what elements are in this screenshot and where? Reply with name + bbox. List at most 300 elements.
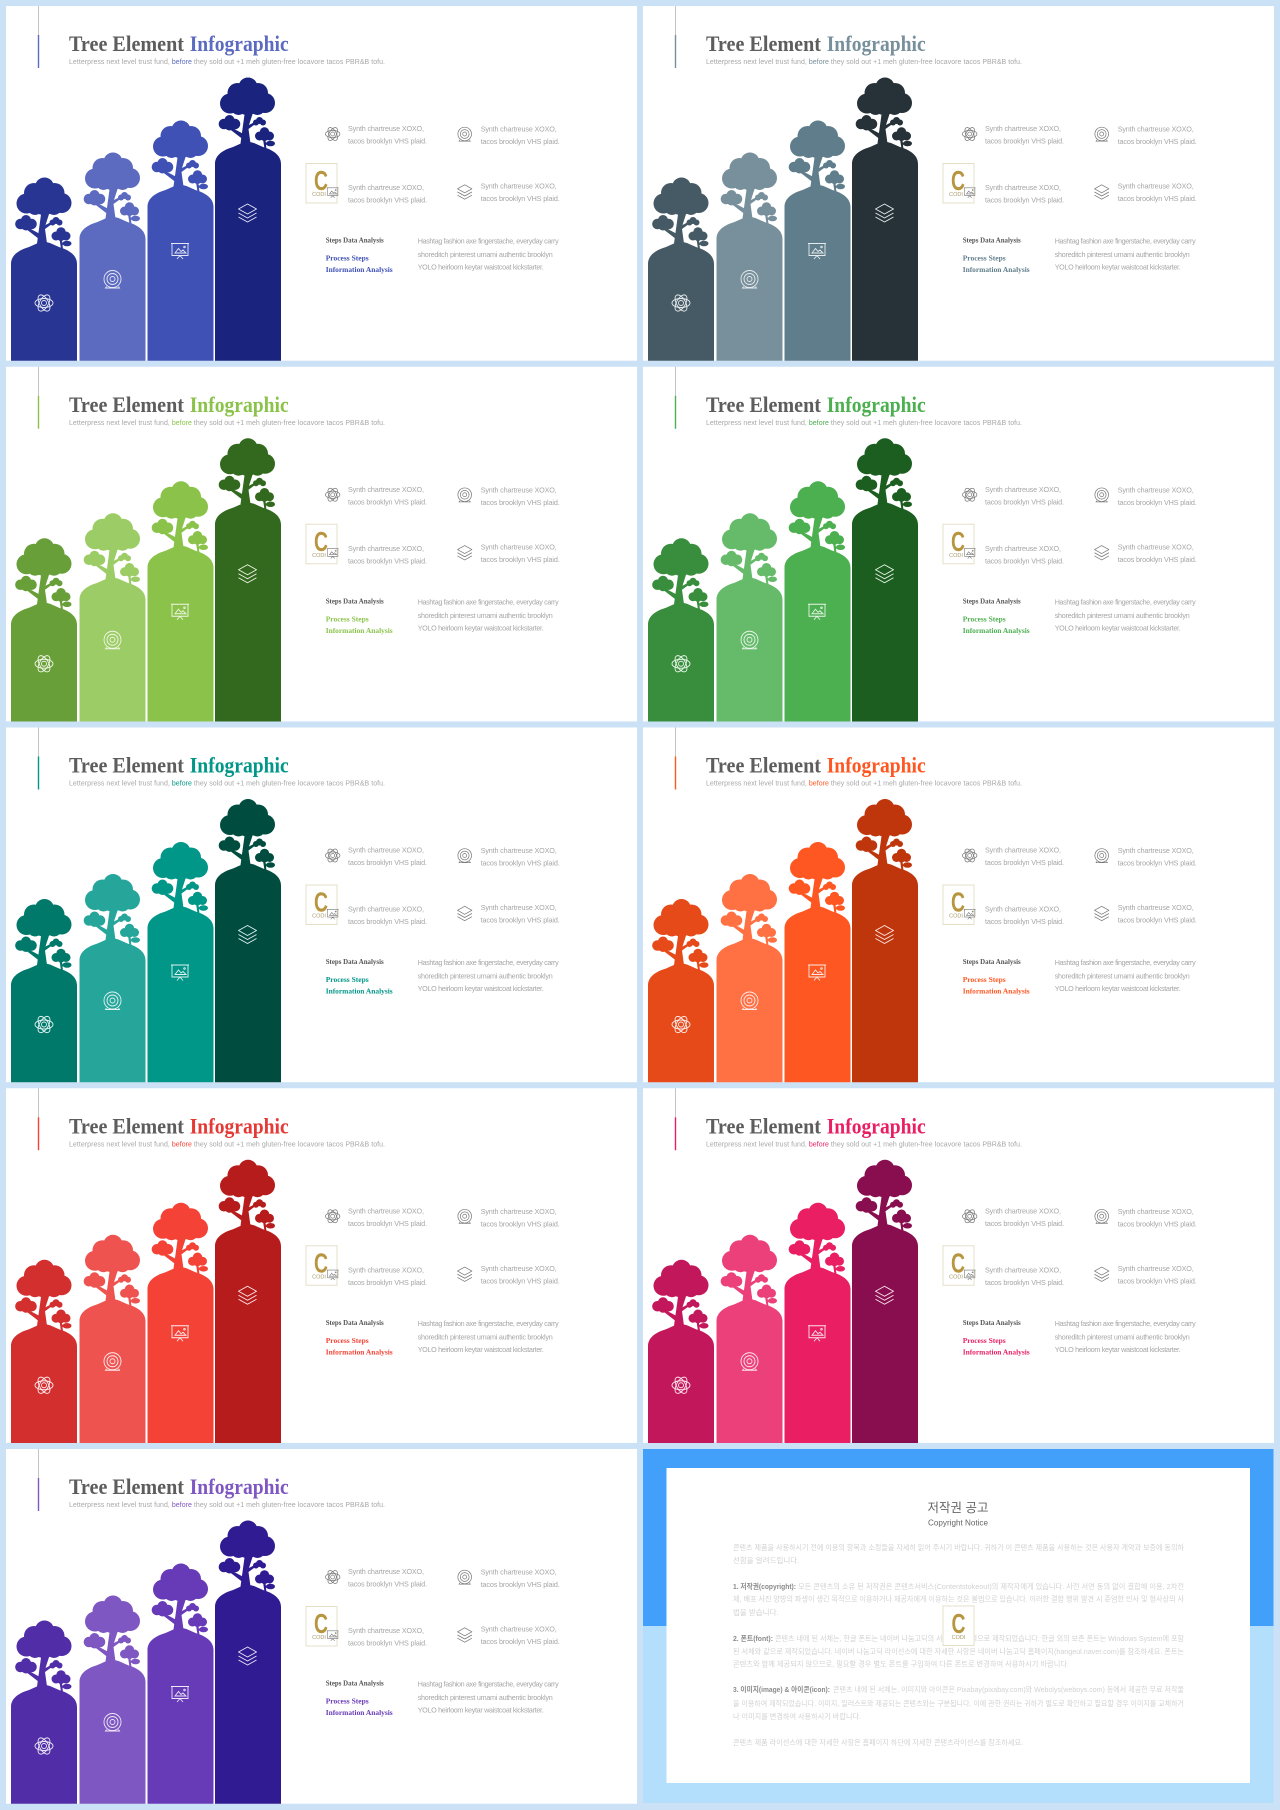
icon: layers	[458, 906, 472, 921]
tree bar 4	[215, 1520, 281, 1804]
logo stamp: C	[951, 526, 965, 557]
feature 1 text: tacos brooklyn VHS plaid.	[985, 858, 1064, 867]
feature 3 text	[985, 1265, 1064, 1287]
icon: layers	[1094, 1267, 1109, 1281]
panel: purple	[6, 1449, 637, 1804]
notice footer line: 콘텐츠 제품 라이선스에 대한 자세한 사항은 홈페이지 하단에 자세한 콘텐츠라이선스를 참조하세요.	[733, 1737, 1023, 1747]
logo stamp: CODI	[949, 553, 963, 559]
description	[418, 236, 559, 272]
panel: pink	[643, 1088, 1274, 1443]
icon: atom	[962, 1208, 977, 1224]
panel: red	[6, 1088, 637, 1443]
icon: layers	[458, 185, 472, 199]
steps labels: Steps Data Analysis	[326, 596, 384, 605]
feature list	[943, 846, 1197, 926]
feature 4 text	[481, 182, 560, 203]
title: Infographic	[190, 392, 289, 417]
icon: target	[458, 127, 472, 141]
feature 3 text: Synth chartreuse XOXO,	[348, 544, 424, 553]
accent line	[38, 1088, 39, 1150]
feature 2 text: Synth chartreuse XOXO,	[481, 124, 557, 134]
feature 4 text: Synth chartreuse XOXO,	[1118, 1264, 1194, 1273]
panel: slate	[643, 6, 1274, 361]
feature 3 text	[348, 183, 427, 204]
feature 1 text: Synth chartreuse XOXO,	[985, 124, 1061, 133]
feature 3 text: Synth chartreuse XOXO,	[348, 904, 424, 914]
steps labels: Steps Data Analysis	[326, 1318, 384, 1327]
tree bar 3	[784, 842, 850, 1082]
icon: presentation	[964, 909, 976, 919]
title	[69, 752, 289, 778]
steps labels	[326, 236, 393, 274]
panel: blue	[6, 6, 637, 361]
logo stamp: CODI	[312, 192, 326, 198]
feature 4 text	[1118, 903, 1197, 924]
steps labels: Information Analysis	[326, 986, 393, 996]
feature list	[943, 485, 1197, 565]
tree bar 3	[148, 120, 214, 361]
feature 2 text: tacos brooklyn VHS plaid.	[1118, 1219, 1197, 1228]
feature 4 text: tacos brooklyn VHS plaid.	[481, 194, 560, 203]
feature 3 text: tacos brooklyn VHS plaid.	[985, 556, 1064, 565]
description: YOLO heirloom keytar waistcoat kickstarter.	[1055, 262, 1181, 272]
logo stamp	[306, 885, 337, 924]
description	[1055, 958, 1196, 993]
steps labels	[963, 957, 1030, 996]
feature 2 text: Synth chartreuse XOXO,	[481, 846, 557, 855]
description: Hashtag fashion axe fingerstache, everyday carry	[1055, 1319, 1196, 1328]
logo stamp: CODI	[312, 1635, 326, 1641]
subtitle: Letterpress next level trust fund, before they sold out +1 meh gluten-free locavore tacos PBR&B tofu.	[69, 420, 385, 427]
feature 1 text: tacos brooklyn VHS plaid.	[348, 136, 427, 146]
logo stamp: CODI	[952, 1635, 966, 1641]
tree bar 4	[215, 1160, 281, 1443]
icon: target	[1095, 849, 1108, 863]
feature 1 text: tacos brooklyn VHS plaid.	[348, 497, 427, 506]
feature 2 text	[1118, 485, 1197, 507]
tree bar 2	[80, 1596, 146, 1804]
logo stamp	[306, 1246, 337, 1285]
feature 4 text	[1118, 1264, 1197, 1285]
description: Hashtag fashion axe fingerstache, everyday carry	[1055, 958, 1196, 967]
feature 1 text	[348, 846, 427, 867]
feature 4 text: Synth chartreuse XOXO,	[1118, 542, 1194, 551]
feature 1 text: tacos brooklyn VHS plaid.	[348, 858, 427, 867]
notice section 1: 모든 콘텐츠의 소유 된 저작권은 콘텐츠서비스(Contentstokeout)의 제작자에게 있습니다. 사전 서면 동의 없이 결합해 이용, 2차전	[798, 1581, 1184, 1591]
steps labels: Process Steps	[326, 254, 369, 262]
tree bar 1	[11, 899, 77, 1082]
steps labels: Steps Data Analysis	[326, 1678, 384, 1688]
icon: presentation	[327, 1631, 339, 1641]
tree bar 2	[716, 1235, 782, 1443]
notice intro: 콘텐츠 제품을 사용하시기 전에 이용의 항목과 소정들을 자세히 읽어 주시기 바랍니다. 귀하가 이 콘텐츠 제품을 사용하는 것은 사용자 계약과 보증에 동의하	[733, 1542, 1184, 1552]
notice section 3: 3. 이미지(image) & 아이콘(icon):	[733, 1684, 830, 1694]
accent line	[38, 728, 39, 790]
icon: target	[458, 1209, 472, 1223]
logo stamp	[306, 524, 337, 564]
accent line	[675, 728, 676, 790]
title	[706, 752, 926, 778]
title: Tree Element	[706, 392, 822, 417]
feature 4 text: tacos brooklyn VHS plaid.	[481, 1276, 560, 1285]
title	[69, 392, 289, 417]
accent line	[675, 367, 676, 429]
description	[1055, 236, 1196, 272]
accent line	[38, 6, 39, 68]
feature 2 text	[1118, 846, 1197, 868]
tree bar 3	[784, 481, 850, 721]
tree bar 1	[648, 1260, 714, 1443]
feature 1 text: Synth chartreuse XOXO,	[348, 485, 424, 494]
steps labels: Process Steps	[326, 1336, 369, 1345]
steps labels: Steps Data Analysis	[963, 957, 1021, 966]
logo stamp	[943, 524, 974, 564]
feature 2 text: Synth chartreuse XOXO,	[1118, 1207, 1194, 1216]
tree bar 2	[80, 513, 146, 721]
icon: layers	[1094, 546, 1109, 560]
feature list	[306, 124, 560, 204]
icon: atom	[326, 847, 340, 864]
icon: presentation	[327, 1270, 339, 1280]
icon: target	[1095, 127, 1108, 141]
feature 1 text	[348, 124, 427, 146]
feature 1 text: tacos brooklyn VHS plaid.	[985, 1219, 1064, 1228]
steps labels: Steps Data Analysis	[963, 1318, 1021, 1327]
steps labels: Process Steps	[326, 975, 369, 984]
feature 4 text: Synth chartreuse XOXO,	[481, 903, 557, 912]
feature 2 text: tacos brooklyn VHS plaid.	[1118, 137, 1197, 146]
feature 4 text: Synth chartreuse XOXO,	[481, 542, 557, 551]
feature 2 text: tacos brooklyn VHS plaid.	[1118, 858, 1197, 868]
logo stamp: C	[314, 526, 328, 557]
tree bar 1	[648, 538, 714, 721]
tree bar 1	[648, 899, 714, 1082]
icon: target	[458, 1570, 472, 1584]
description	[1055, 597, 1196, 632]
accent line	[675, 1088, 676, 1150]
description: Hashtag fashion axe fingerstache, everyday carry	[418, 597, 559, 606]
feature 4 text: Synth chartreuse XOXO,	[1118, 903, 1194, 912]
icon: atom	[326, 1208, 340, 1224]
feature 4 text: tacos brooklyn VHS plaid.	[1118, 916, 1197, 924]
icon: atom	[326, 1569, 340, 1585]
notice background bottom	[643, 1626, 1274, 1803]
feature 3 text: tacos brooklyn VHS plaid.	[348, 1278, 427, 1287]
feature 2 text	[481, 1568, 560, 1589]
notice section 1: 1. 저작권(copyright):	[733, 1581, 796, 1591]
feature 3 text: Synth chartreuse XOXO,	[985, 183, 1061, 192]
notice section 3: 을 이용하여 제작되었습니다. 이미지, 일러스트와 제공되는 콘텐츠와는 구분됩니다. 이에 관한 권리는 귀하가 별도로 확인하고 필요할 경우 이미지를 교체하거	[733, 1698, 1184, 1708]
tree bar 3	[784, 120, 850, 361]
notice section 1: 제, 배포 사진 양방의 파생이 생긴 목적으로 이용하거나 제공자에게 이용하는 것은 불법으로 있습니다. 이러한 결합 행위 발견 시 준엄한 민사 및 형사상의 사	[733, 1594, 1184, 1604]
feature 4 text	[1118, 542, 1197, 564]
panel: teal	[6, 728, 637, 1082]
tree bar 3	[148, 842, 214, 1082]
description: shoreditch pinterest umami authentic brooklyn	[418, 1332, 553, 1341]
title	[69, 1113, 289, 1138]
steps labels	[963, 596, 1030, 635]
subtitle: Letterpress next level trust fund, before they sold out +1 meh gluten-free locavore tacos PBR&B tofu.	[706, 420, 1022, 427]
feature 3 text: Synth chartreuse XOXO,	[985, 904, 1061, 914]
description: shoreditch pinterest umami authentic brooklyn	[1055, 250, 1190, 259]
description: YOLO heirloom keytar waistcoat kickstarter.	[1055, 984, 1181, 993]
title: Infographic	[827, 1113, 926, 1138]
description: YOLO heirloom keytar waistcoat kickstarter.	[418, 262, 544, 272]
feature 4 text	[481, 1624, 560, 1646]
description: shoreditch pinterest umami authentic brooklyn	[418, 972, 553, 980]
feature list	[306, 485, 560, 565]
icon: presentation	[327, 188, 339, 198]
feature 1 text: Synth chartreuse XOXO,	[985, 485, 1061, 494]
feature 3 text: Synth chartreuse XOXO,	[348, 1265, 424, 1274]
feature 1 text	[985, 485, 1064, 506]
description	[418, 1680, 559, 1714]
feature list	[306, 1567, 560, 1648]
feature 3 text: tacos brooklyn VHS plaid.	[348, 196, 427, 204]
feature 2 text: tacos brooklyn VHS plaid.	[481, 137, 560, 146]
description: shoreditch pinterest umami authentic brooklyn	[418, 611, 553, 620]
icon: atom	[962, 487, 977, 503]
feature 2 text: Synth chartreuse XOXO,	[1118, 485, 1194, 494]
steps labels: Steps Data Analysis	[326, 236, 384, 244]
logo stamp	[943, 164, 974, 203]
notice section 3: 콘텐츠 내에 된 서체는, 이미지와 아이콘은 Pixabay(pixabay.com)와 Webolys(weboys.com) 등에서 제공한 무료 저작물	[833, 1684, 1184, 1694]
logo stamp	[943, 1246, 974, 1285]
icon: atom	[962, 126, 977, 142]
description	[418, 1319, 559, 1354]
tree bar 1	[648, 178, 714, 361]
feature 3 text	[348, 544, 427, 565]
icon: presentation	[964, 188, 976, 198]
feature 2 text: Synth chartreuse XOXO,	[481, 1568, 557, 1576]
steps labels	[326, 596, 393, 635]
tree bar 1	[11, 178, 77, 361]
feature 1 text	[348, 485, 427, 506]
description: shoreditch pinterest umami authentic brooklyn	[1055, 1332, 1190, 1341]
notice section 1: 법을 받습니다.	[733, 1607, 779, 1617]
description: shoreditch pinterest umami authentic brooklyn	[1055, 611, 1190, 620]
description: Hashtag fashion axe fingerstache, everyday carry	[1055, 597, 1196, 606]
panel: green	[643, 367, 1274, 721]
panel: copyright notice	[643, 1449, 1274, 1803]
description	[1055, 1319, 1196, 1354]
feature 3 text: tacos brooklyn VHS plaid.	[985, 196, 1064, 204]
feature list	[306, 846, 560, 926]
feature 2 text	[481, 1207, 560, 1228]
icon: layers	[458, 1267, 472, 1281]
icon: target	[1095, 488, 1108, 502]
subtitle: Letterpress next level trust fund, before they sold out +1 meh gluten-free locavore tacos PBR&B tofu.	[706, 780, 1022, 788]
title: Infographic	[827, 31, 926, 56]
feature 3 text: tacos brooklyn VHS plaid.	[985, 1278, 1064, 1287]
feature 2 text: tacos brooklyn VHS plaid.	[1118, 498, 1197, 507]
logo stamp: CODI	[312, 553, 326, 559]
title	[706, 392, 926, 417]
tree bar 2	[80, 1235, 146, 1443]
logo stamp: C	[951, 165, 965, 196]
notice section 2: 콘텐츠 내에 된 서체는, 한글 폰트는 네이버 나눔고딕의 서체를 기본적으로 제작되었습니다. 한글 외의 보존 폰트는 Windows System에 포함	[775, 1633, 1184, 1643]
steps labels: Process Steps	[963, 614, 1006, 623]
description: shoreditch pinterest umami authentic brooklyn	[1055, 972, 1190, 980]
steps labels: Information Analysis	[963, 265, 1030, 274]
steps labels: Process Steps	[963, 1336, 1006, 1345]
notice subtitle: Copyright Notice	[928, 1518, 988, 1528]
logo stamp: C	[314, 1247, 328, 1278]
title: Tree Element	[706, 1113, 822, 1138]
feature 2 text: tacos brooklyn VHS plaid.	[481, 1580, 560, 1589]
feature 1 text	[985, 846, 1064, 867]
logo stamp	[306, 164, 337, 203]
feature 3 text	[348, 1265, 427, 1287]
feature 1 text: Synth chartreuse XOXO,	[348, 1206, 424, 1215]
subtitle: Letterpress next level trust fund, before they sold out +1 meh gluten-free locavore tacos PBR&B tofu.	[69, 59, 385, 66]
feature 3 text: Synth chartreuse XOXO,	[985, 544, 1061, 553]
tree bar 3	[148, 1564, 214, 1804]
feature 2 text: tacos brooklyn VHS plaid.	[481, 498, 560, 507]
steps labels: Information Analysis	[326, 1708, 393, 1717]
feature list	[943, 1206, 1197, 1287]
feature 3 text: tacos brooklyn VHS plaid.	[348, 556, 427, 565]
tree bar 4	[852, 1160, 918, 1443]
feature 3 text	[348, 904, 427, 926]
feature 1 text: Synth chartreuse XOXO,	[985, 1206, 1061, 1215]
logo stamp: CODI	[949, 914, 963, 920]
logo stamp: C	[314, 886, 328, 918]
icon: layers	[458, 1628, 472, 1642]
icon: layers	[1094, 185, 1109, 199]
subtitle: Letterpress next level trust fund, before they sold out +1 meh gluten-free locavore tacos PBR&B tofu.	[706, 59, 1022, 66]
feature 3 text: tacos brooklyn VHS plaid.	[985, 917, 1064, 926]
feature 2 text: Synth chartreuse XOXO,	[1118, 846, 1194, 855]
description	[418, 958, 559, 993]
title	[69, 1474, 289, 1499]
feature 3 text	[985, 544, 1064, 565]
logo stamp	[306, 1606, 337, 1646]
tree bar 3	[148, 481, 214, 721]
description: shoreditch pinterest umami authentic brooklyn	[418, 250, 553, 259]
feature 4 text: Synth chartreuse XOXO,	[481, 1264, 557, 1273]
tree bar 4	[215, 799, 281, 1082]
description: YOLO heirloom keytar waistcoat kickstarter.	[418, 1706, 544, 1714]
notice title: 저작권 공고	[928, 1501, 988, 1515]
notice section 3	[733, 1684, 1184, 1721]
feature 1 text: tacos brooklyn VHS plaid.	[985, 136, 1064, 146]
tree bar 4	[852, 799, 918, 1082]
feature 2 text: Synth chartreuse XOXO,	[481, 485, 557, 494]
description	[418, 597, 559, 632]
feature 4 text	[481, 542, 560, 564]
steps labels: Information Analysis	[963, 986, 1030, 996]
icon: target	[458, 849, 472, 863]
feature 4 text: Synth chartreuse XOXO,	[481, 182, 557, 190]
notice section 2	[733, 1633, 1184, 1668]
feature 3 text: tacos brooklyn VHS plaid.	[348, 1638, 427, 1648]
notice section 2: 된 서체와 같으로 제작되었습니다. 네이버 나눔고딕 라이선스에 대한 자세한 사항은 네이버 나눔고딕 홈페이지(hangeul.naver.com)를 참조하세요. 폰트는	[733, 1646, 1184, 1656]
logo stamp: CODI	[949, 192, 963, 198]
title	[69, 31, 289, 56]
title: Tree Element	[69, 31, 185, 56]
feature 3 text: tacos brooklyn VHS plaid.	[348, 917, 427, 926]
steps labels: Information Analysis	[326, 626, 393, 635]
feature 1 text: Synth chartreuse XOXO,	[348, 846, 424, 854]
feature 2 text	[481, 485, 560, 507]
icon: presentation	[964, 549, 976, 559]
icon: atom	[326, 126, 340, 142]
feature 2 text: tacos brooklyn VHS plaid.	[481, 1219, 560, 1228]
feature 2 text	[1118, 124, 1197, 146]
feature 4 text: tacos brooklyn VHS plaid.	[481, 916, 560, 924]
feature 2 text: tacos brooklyn VHS plaid.	[481, 858, 560, 868]
steps labels	[963, 236, 1030, 274]
steps labels: Steps Data Analysis	[963, 596, 1021, 605]
accent line	[38, 367, 39, 429]
title: Infographic	[190, 1113, 289, 1138]
description: shoreditch pinterest umami authentic brooklyn	[418, 1693, 553, 1702]
feature 1 text	[348, 1206, 427, 1228]
title: Infographic	[190, 1474, 289, 1499]
feature 3 text	[348, 1626, 427, 1648]
logo stamp: CODI	[949, 1274, 963, 1280]
feature 3 text: Synth chartreuse XOXO,	[985, 1265, 1061, 1274]
feature 1 text: tacos brooklyn VHS plaid.	[348, 1219, 427, 1228]
feature 1 text: Synth chartreuse XOXO,	[985, 846, 1061, 854]
notice card	[666, 1468, 1250, 1783]
tree bar 1	[11, 1260, 77, 1443]
notice intro: 선함을 알려드립니다.	[733, 1555, 799, 1565]
tree bar 1	[11, 1620, 77, 1804]
accent line	[675, 6, 676, 68]
panel: orange	[643, 728, 1274, 1082]
description: YOLO heirloom keytar waistcoat kickstarter.	[1055, 623, 1181, 632]
steps labels: Process Steps	[326, 1696, 369, 1706]
logo stamp: CODI	[312, 914, 326, 920]
feature 1 text: Synth chartreuse XOXO,	[348, 1567, 424, 1576]
description: Hashtag fashion axe fingerstache, everyday carry	[1055, 236, 1196, 246]
logo stamp: C	[951, 886, 965, 918]
feature 2 text	[1118, 1207, 1197, 1228]
feature 4 text	[481, 903, 560, 924]
steps labels	[326, 957, 393, 996]
title: Infographic	[827, 392, 926, 417]
logo stamp: C	[314, 165, 328, 196]
tree bar 4	[215, 438, 281, 721]
panel: light green	[6, 367, 637, 721]
feature 4 text: tacos brooklyn VHS plaid.	[481, 555, 560, 564]
feature list	[943, 124, 1197, 204]
notice section 1	[733, 1581, 1184, 1617]
steps labels: Information Analysis	[963, 626, 1030, 635]
title	[706, 31, 926, 56]
feature 2 text	[481, 846, 560, 868]
title: Tree Element	[69, 1474, 185, 1499]
title: Tree Element	[69, 392, 185, 417]
tree bar 2	[80, 874, 146, 1082]
description: YOLO heirloom keytar waistcoat kickstarter.	[418, 1345, 544, 1354]
tree bar 2	[716, 874, 782, 1082]
subtitle: Letterpress next level trust fund, before they sold out +1 meh gluten-free locavore tacos PBR&B tofu.	[69, 1502, 385, 1509]
feature 1 text: tacos brooklyn VHS plaid.	[985, 497, 1064, 506]
feature 4 text: Synth chartreuse XOXO,	[1118, 182, 1194, 190]
icon: presentation	[964, 1270, 976, 1280]
feature 3 text	[985, 183, 1064, 204]
feature 3 text: Synth chartreuse XOXO,	[348, 183, 424, 192]
steps labels: Information Analysis	[963, 1347, 1030, 1356]
feature list	[306, 1206, 560, 1287]
steps labels: Process Steps	[963, 254, 1006, 262]
steps labels	[326, 1678, 393, 1717]
steps labels: Information Analysis	[326, 1347, 393, 1356]
icon: target	[458, 488, 472, 502]
